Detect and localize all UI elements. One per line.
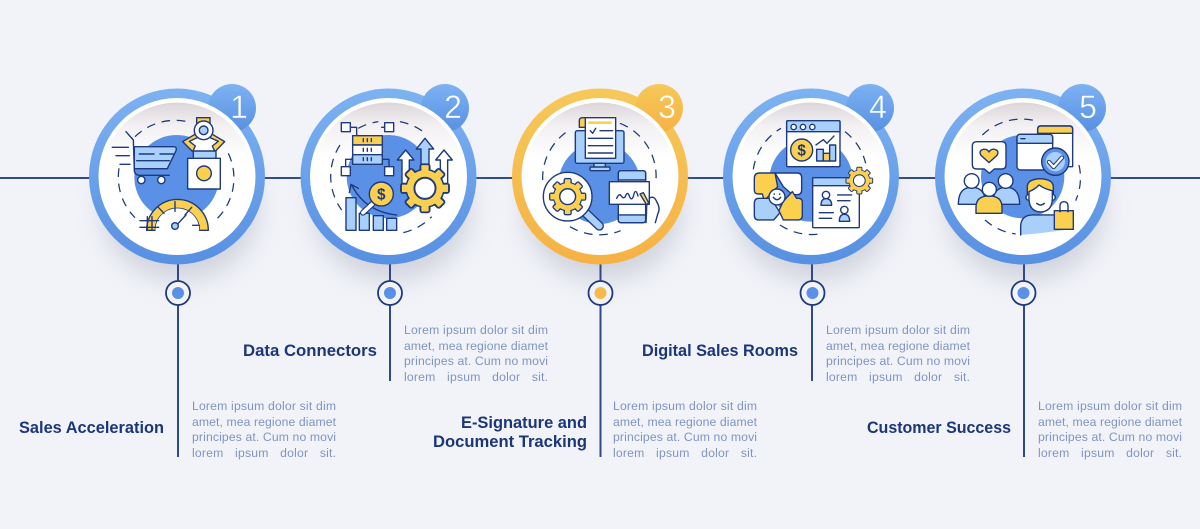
step 1 number badge [208,84,256,132]
text: step 1 description: amet, mea regione diamet [192,415,337,429]
icon: customers, feedback and shopper [958,119,1080,235]
step 4 number badge [846,84,894,132]
step 3 number badge [635,84,683,132]
icon: data server, chart and gear [331,122,452,233]
step 3 number badge: 3 [658,89,676,125]
text: Customer Success title: Customer Success [867,418,1011,437]
text: step 1 description: lorem ipsum dolor sit. [192,446,336,460]
text: step 1 description: Lorem ipsum dolor sit dim [192,399,336,413]
step 1 ring [89,88,265,264]
panel: step 2 Data Connectors [243,84,549,384]
step 4 number badge: 4 [869,89,887,125]
text: step 5 description: Lorem ipsum dolor sit dim [1038,399,1182,413]
text: step 2 description: Lorem ipsum dolor sit dim [404,323,548,337]
step 2 ring [300,88,476,264]
text: step 3 description: principes at. Cum no movi [613,430,757,444]
text: step 4 description: amet, mea regione diamet [826,339,971,353]
step 5 node [1012,281,1036,305]
text: Digital Sales Rooms title: Digital Sales Rooms [642,341,798,360]
step 3 ring [512,88,688,264]
text: step 2 description: principes at. Cum no movi [404,354,548,368]
icon: cart, robot arm and speed gauge [112,118,234,230]
text: step 3 description: lorem ipsum dolor sit. [613,446,757,460]
text: step 5 description: amet, mea regione diamet [1038,415,1183,429]
text: step 2 description: amet, mea regione diamet [404,339,549,353]
step 2 node [378,281,402,305]
text: step 4 description: lorem ipsum dolor sit. [826,370,970,384]
step 5 number badge [1058,84,1106,132]
panel: step 1 Sales Acceleration [19,84,337,460]
text: E-Signature and Document Tracking title: Document Tracking [433,432,587,451]
panel: step 4 Digital Sales Rooms [642,84,971,384]
icon: document monitor, magnifier gear and signing phone [543,118,659,235]
text: step 1 description: principes at. Cum no movi [192,430,336,444]
text: step 5 description: principes at. Cum no movi [1038,430,1182,444]
text: step 3 description: Lorem ipsum dolor sit dim [613,399,757,413]
text: step 1 description [192,399,337,460]
text: Data Connectors title: Data Connectors [243,341,377,360]
panel: step 5 Customer Success [867,84,1183,460]
text: step 4 description [826,323,971,384]
icon: data server, chart and gear: $ [377,187,386,204]
step 4 ring [723,88,899,264]
text: step 3 description: amet, mea regione diamet [613,415,758,429]
text: step 5 description: lorem ipsum dolor sit. [1038,446,1182,460]
step 2 number badge [421,84,469,132]
icon: sales dashboard, chat bubbles and profile card: $ [797,143,806,160]
text: Sales Acceleration title: Sales Acceleration [19,418,164,437]
panel: step 3 E-Signature and Document Tracking [433,84,758,460]
icon: sales dashboard, chat bubbles and profile card [753,121,873,235]
text: E-Signature and Document Tracking title [433,413,587,451]
text: step 2 description: lorem ipsum dolor sit. [404,370,548,384]
step 3 node [588,281,612,305]
text: step 4 description: Lorem ipsum dolor sit dim [826,323,970,337]
step 1 node [166,281,190,305]
step 4 node [800,281,824,305]
timeline axis [0,177,1200,179]
text: step 5 description [1038,399,1183,460]
step 1 number badge: 1 [230,89,248,125]
text: E-Signature and Document Tracking title: E-Signature and [461,413,587,432]
text: step 4 description: principes at. Cum no movi [826,354,970,368]
step 5 ring [935,88,1111,264]
text: step 3 description [613,399,758,460]
step 5 number badge: 5 [1079,89,1097,125]
step 2 number badge: 2 [444,89,462,125]
text: step 2 description [404,323,549,384]
